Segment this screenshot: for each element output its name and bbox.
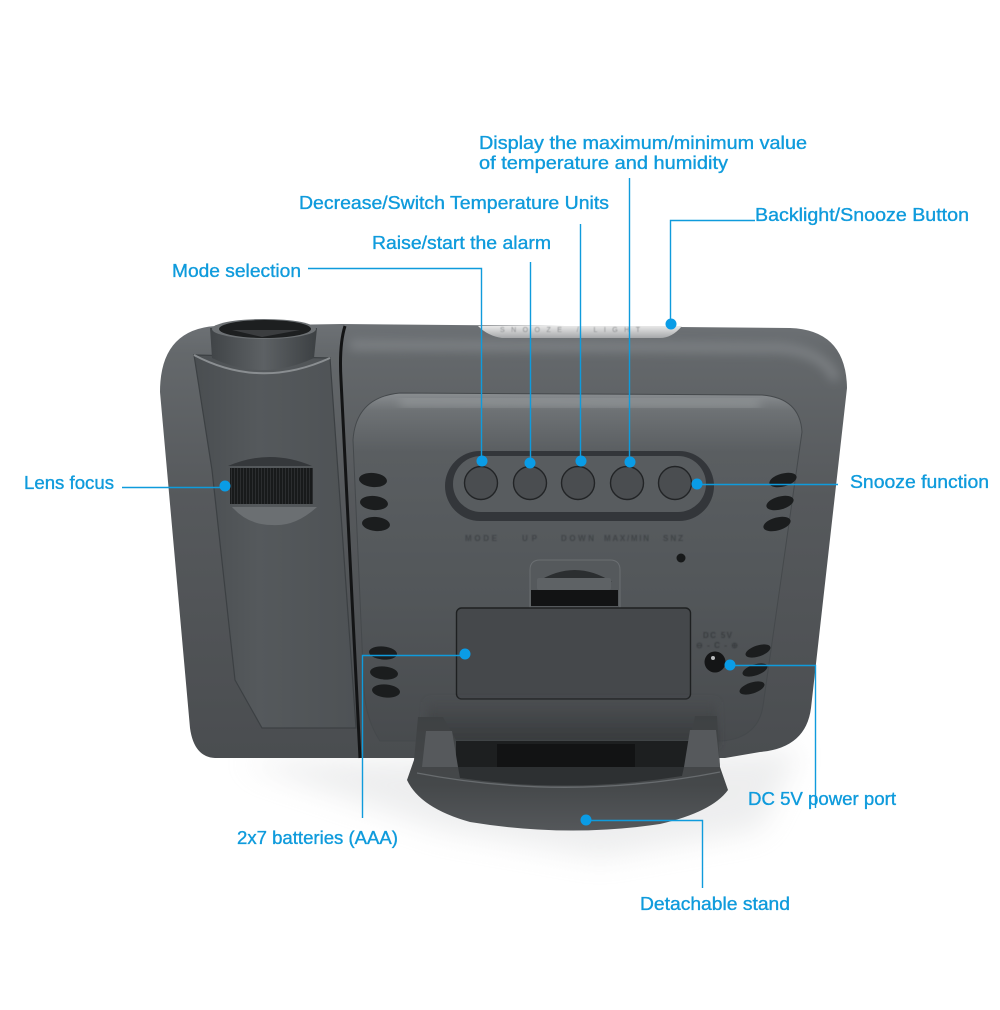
DC power port: DC 5V bbox=[703, 631, 733, 640]
button captions: SNZ bbox=[663, 534, 683, 543]
right pillar face bbox=[684, 730, 720, 767]
button captions: MODE bbox=[465, 534, 498, 543]
top silver button: SNOOZE / LIGHT bbox=[500, 327, 641, 334]
button captions: UP bbox=[522, 534, 538, 543]
detachable stand bbox=[407, 702, 728, 831]
microphone hole bbox=[676, 554, 686, 562]
tray front edge bbox=[417, 772, 720, 787]
label: mode: Mode selection bbox=[172, 261, 301, 281]
label: max/min value: Display the maximum/minimum value bbox=[479, 133, 807, 153]
button captions bbox=[465, 534, 683, 543]
tray floor bbox=[458, 767, 684, 786]
projector arm panel bbox=[194, 355, 356, 728]
stand clip bbox=[530, 560, 620, 608]
label: decrease: Decrease/Switch Temperature Units bbox=[299, 193, 609, 213]
label: batteries: 2x7 batteries (AAA) bbox=[237, 828, 398, 848]
button captions: MAX/MIN bbox=[604, 534, 649, 543]
label: backlight: Backlight/Snooze Button bbox=[755, 205, 969, 225]
top silver button bbox=[478, 326, 682, 338]
battery door bbox=[456, 608, 690, 699]
slot recess bbox=[497, 744, 635, 767]
label: max/min value line two: of temperature and humidity bbox=[479, 153, 728, 173]
callout lines bbox=[122, 178, 838, 888]
clock body bbox=[160, 319, 847, 758]
inner recessed panel bbox=[353, 393, 802, 741]
label: snooze function: Snooze function bbox=[850, 472, 989, 492]
body seam bbox=[340, 326, 360, 758]
drop shadow bbox=[240, 750, 800, 858]
left pillar face bbox=[422, 731, 458, 767]
button well bbox=[445, 451, 714, 521]
label: lens focus: Lens focus bbox=[24, 473, 114, 493]
callout dots bbox=[220, 318, 736, 826]
stand back wall bbox=[425, 702, 718, 745]
button captions: DOWN bbox=[561, 534, 594, 543]
lens cylinder bbox=[210, 319, 317, 370]
vents bbox=[358, 470, 798, 699]
lens focus wheel bbox=[228, 457, 317, 525]
DC power port: ⊖-C-⊕ bbox=[696, 641, 738, 650]
slot opening bbox=[456, 741, 690, 767]
label: raise: Raise/start the alarm bbox=[372, 233, 551, 253]
label: power port: DC 5V power port bbox=[748, 789, 896, 809]
control buttons bbox=[464, 466, 692, 500]
DC power port bbox=[696, 631, 738, 672]
label: stand: Detachable stand bbox=[640, 894, 790, 914]
stand tray base bbox=[407, 716, 728, 831]
